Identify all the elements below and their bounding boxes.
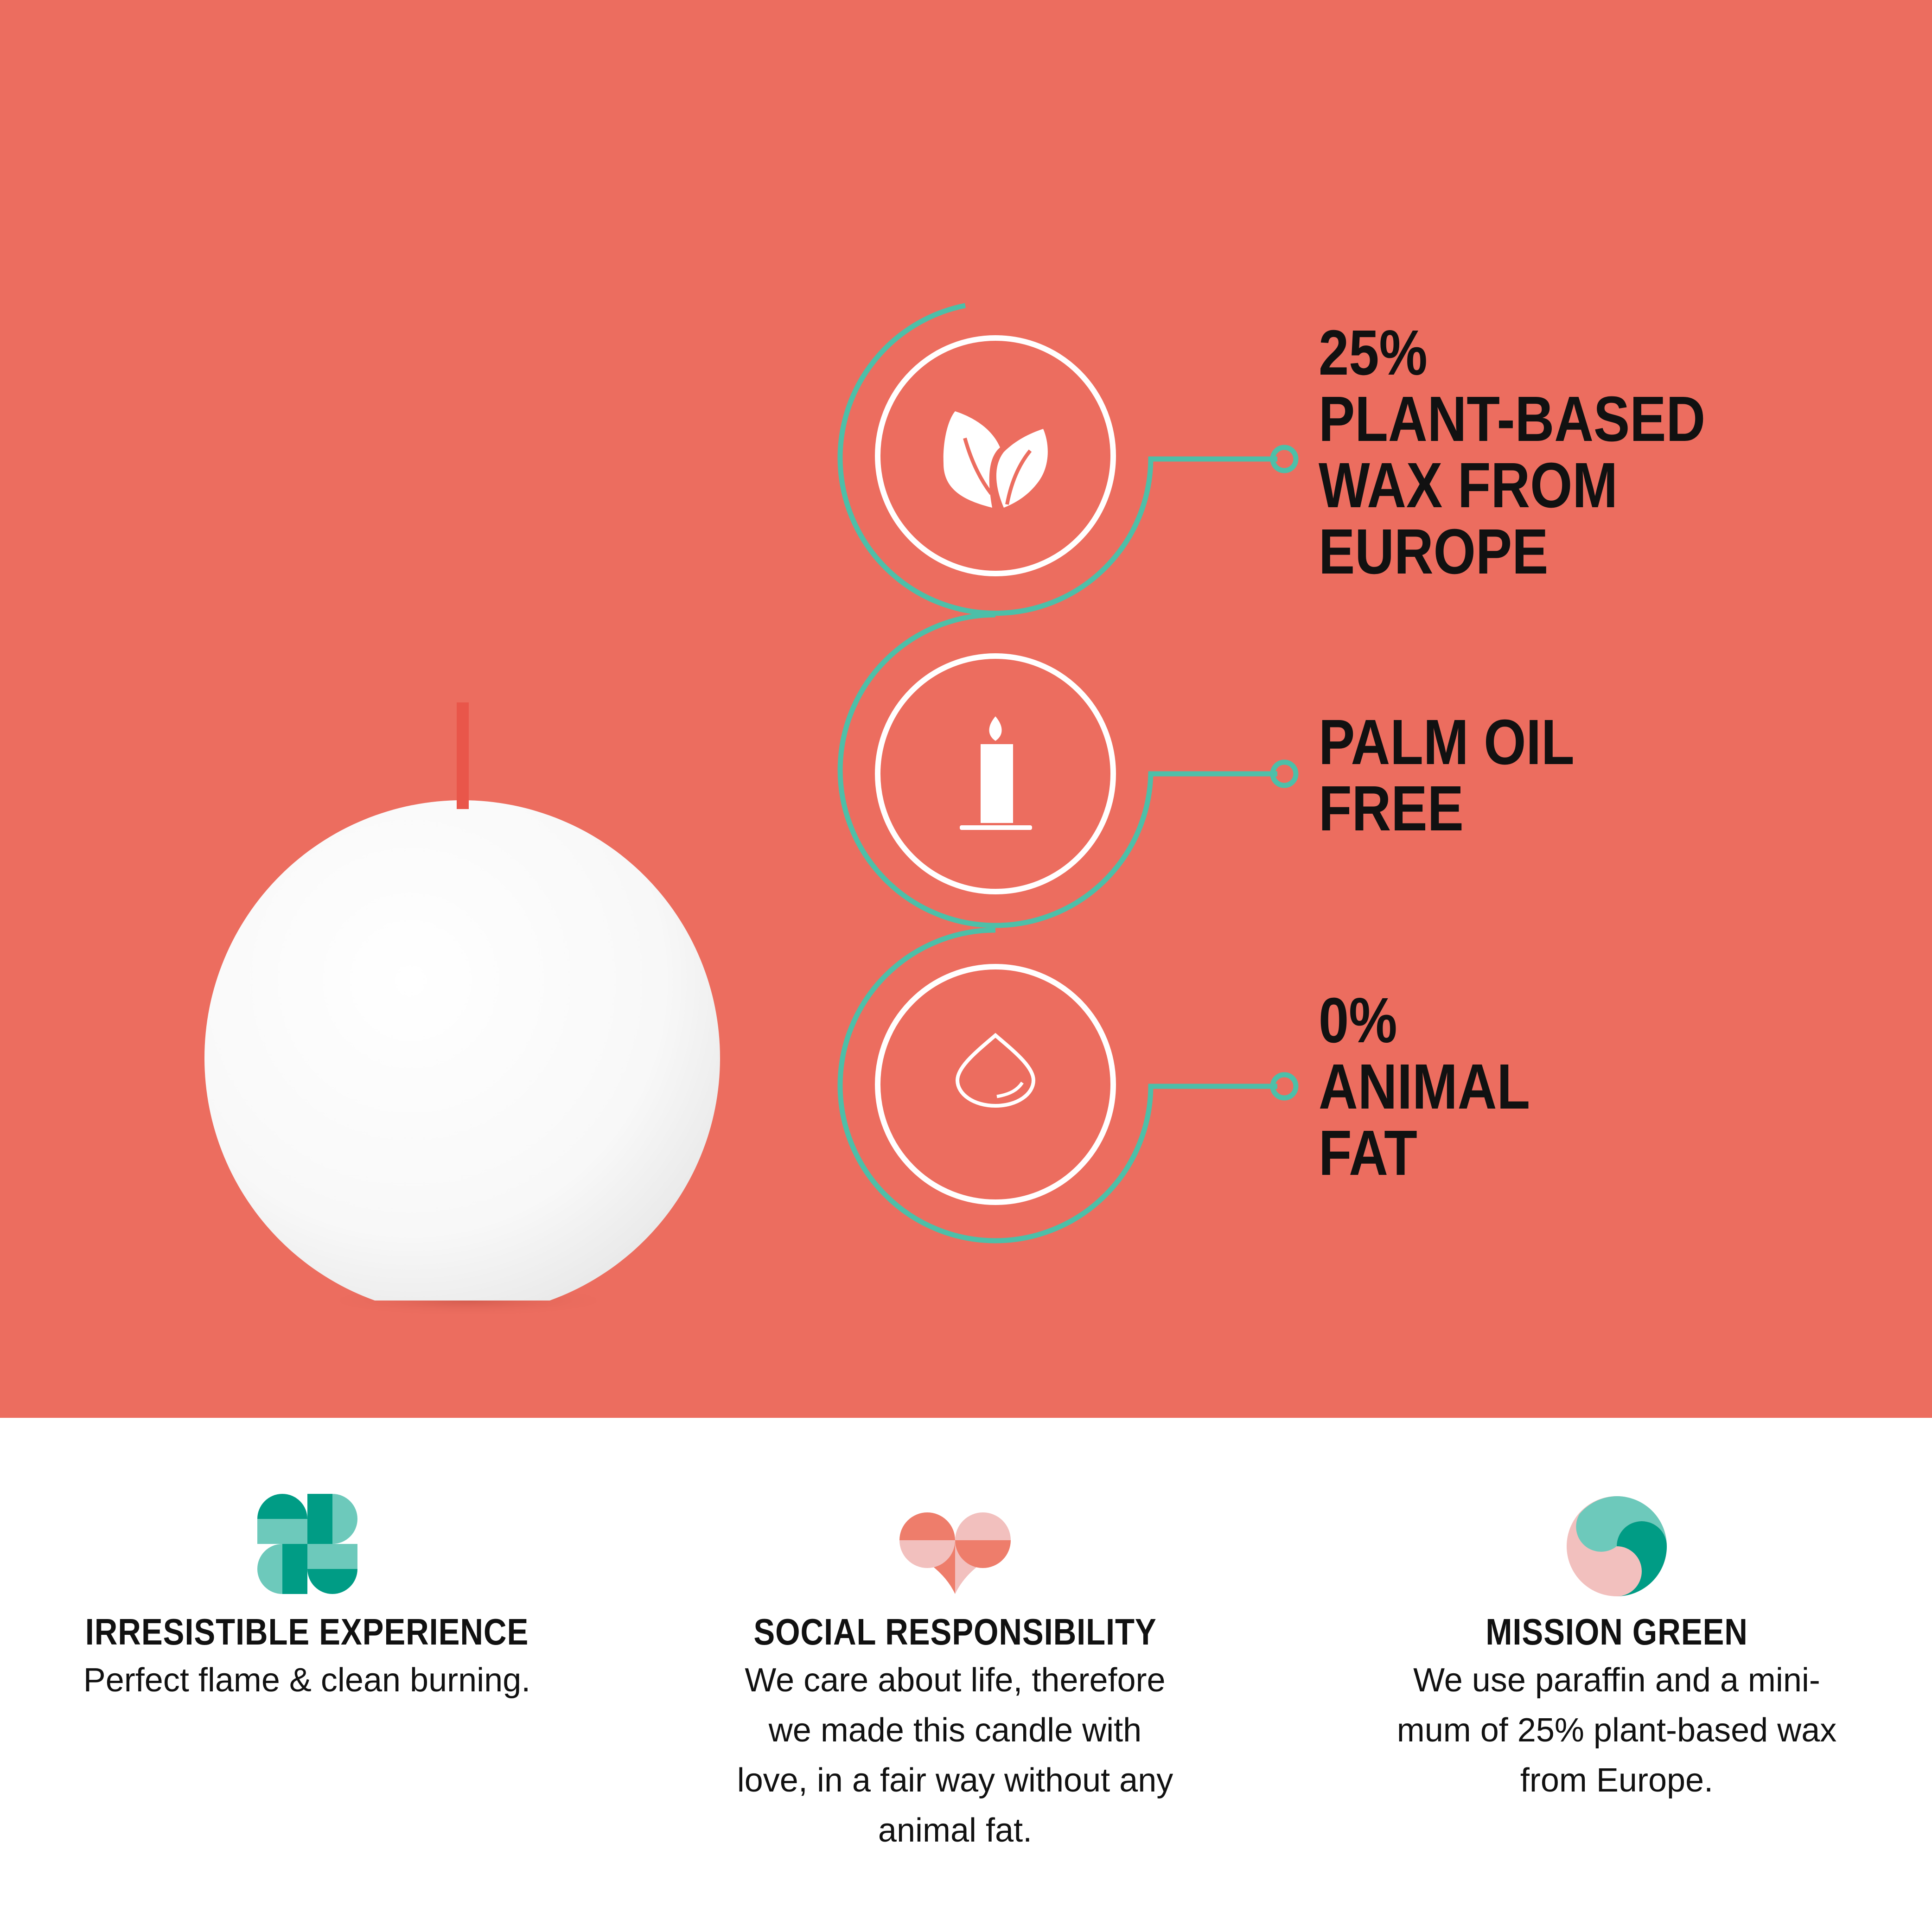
feature text: palm oil free: PALM OIL — [1319, 707, 1575, 778]
icon: mission green — [1566, 1495, 1668, 1597]
column: social responsibility: We care about life, therefore — [745, 1662, 1166, 1699]
column: irresistible experience — [6, 1609, 608, 1705]
column: mission green: We use paraffin and a mini- — [1413, 1662, 1820, 1699]
feature text: animal fat: 0% — [1319, 985, 1397, 1056]
spiral connector with icon circles — [0, 0, 1932, 1418]
feature text: animal fat — [1319, 988, 1530, 1186]
column: mission green — [1315, 1609, 1918, 1805]
feature text: palm oil free — [1319, 709, 1575, 842]
icon: clover — [257, 1494, 357, 1594]
column: social responsibility — [654, 1609, 1256, 1855]
feature text: plant-based wax: WAX FROM — [1319, 450, 1618, 521]
feature text: plant-based wax: 25% — [1319, 317, 1428, 389]
feature text: palm oil free: FREE — [1319, 773, 1464, 844]
column: social responsibility: SOCIAL RESPONSIBILITY — [753, 1611, 1157, 1652]
column: social responsibility: love, in a fair way without any — [737, 1762, 1173, 1799]
feature text: animal fat: FAT — [1319, 1117, 1417, 1189]
circle: candle — [878, 656, 1113, 892]
circle: leaf — [878, 338, 1113, 574]
column: irresistible experience: Perfect flame & clean burning. — [83, 1662, 530, 1699]
column: social responsibility: animal fat. — [878, 1812, 1032, 1849]
feature text: plant-based wax: PLANT-BASED — [1319, 383, 1705, 455]
feature text: plant-based wax: EUROPE — [1319, 516, 1548, 587]
candle ball — [204, 702, 720, 1307]
feature text: plant-based wax — [1319, 320, 1705, 585]
coral background panel — [0, 0, 1932, 1418]
column: irresistible experience: IRRESISTIBLE EXPERIENCE — [85, 1611, 529, 1652]
icon: heart — [895, 1507, 1015, 1600]
column: mission green: from Europe. — [1520, 1762, 1713, 1799]
feature text: animal fat: ANIMAL — [1319, 1051, 1530, 1122]
column: mission green: mum of 25% plant-based wax — [1397, 1712, 1836, 1749]
column: mission green: MISSION GREEN — [1486, 1611, 1748, 1652]
circle: drop — [878, 967, 1113, 1202]
column: social responsibility: we made this candle with — [769, 1712, 1141, 1749]
